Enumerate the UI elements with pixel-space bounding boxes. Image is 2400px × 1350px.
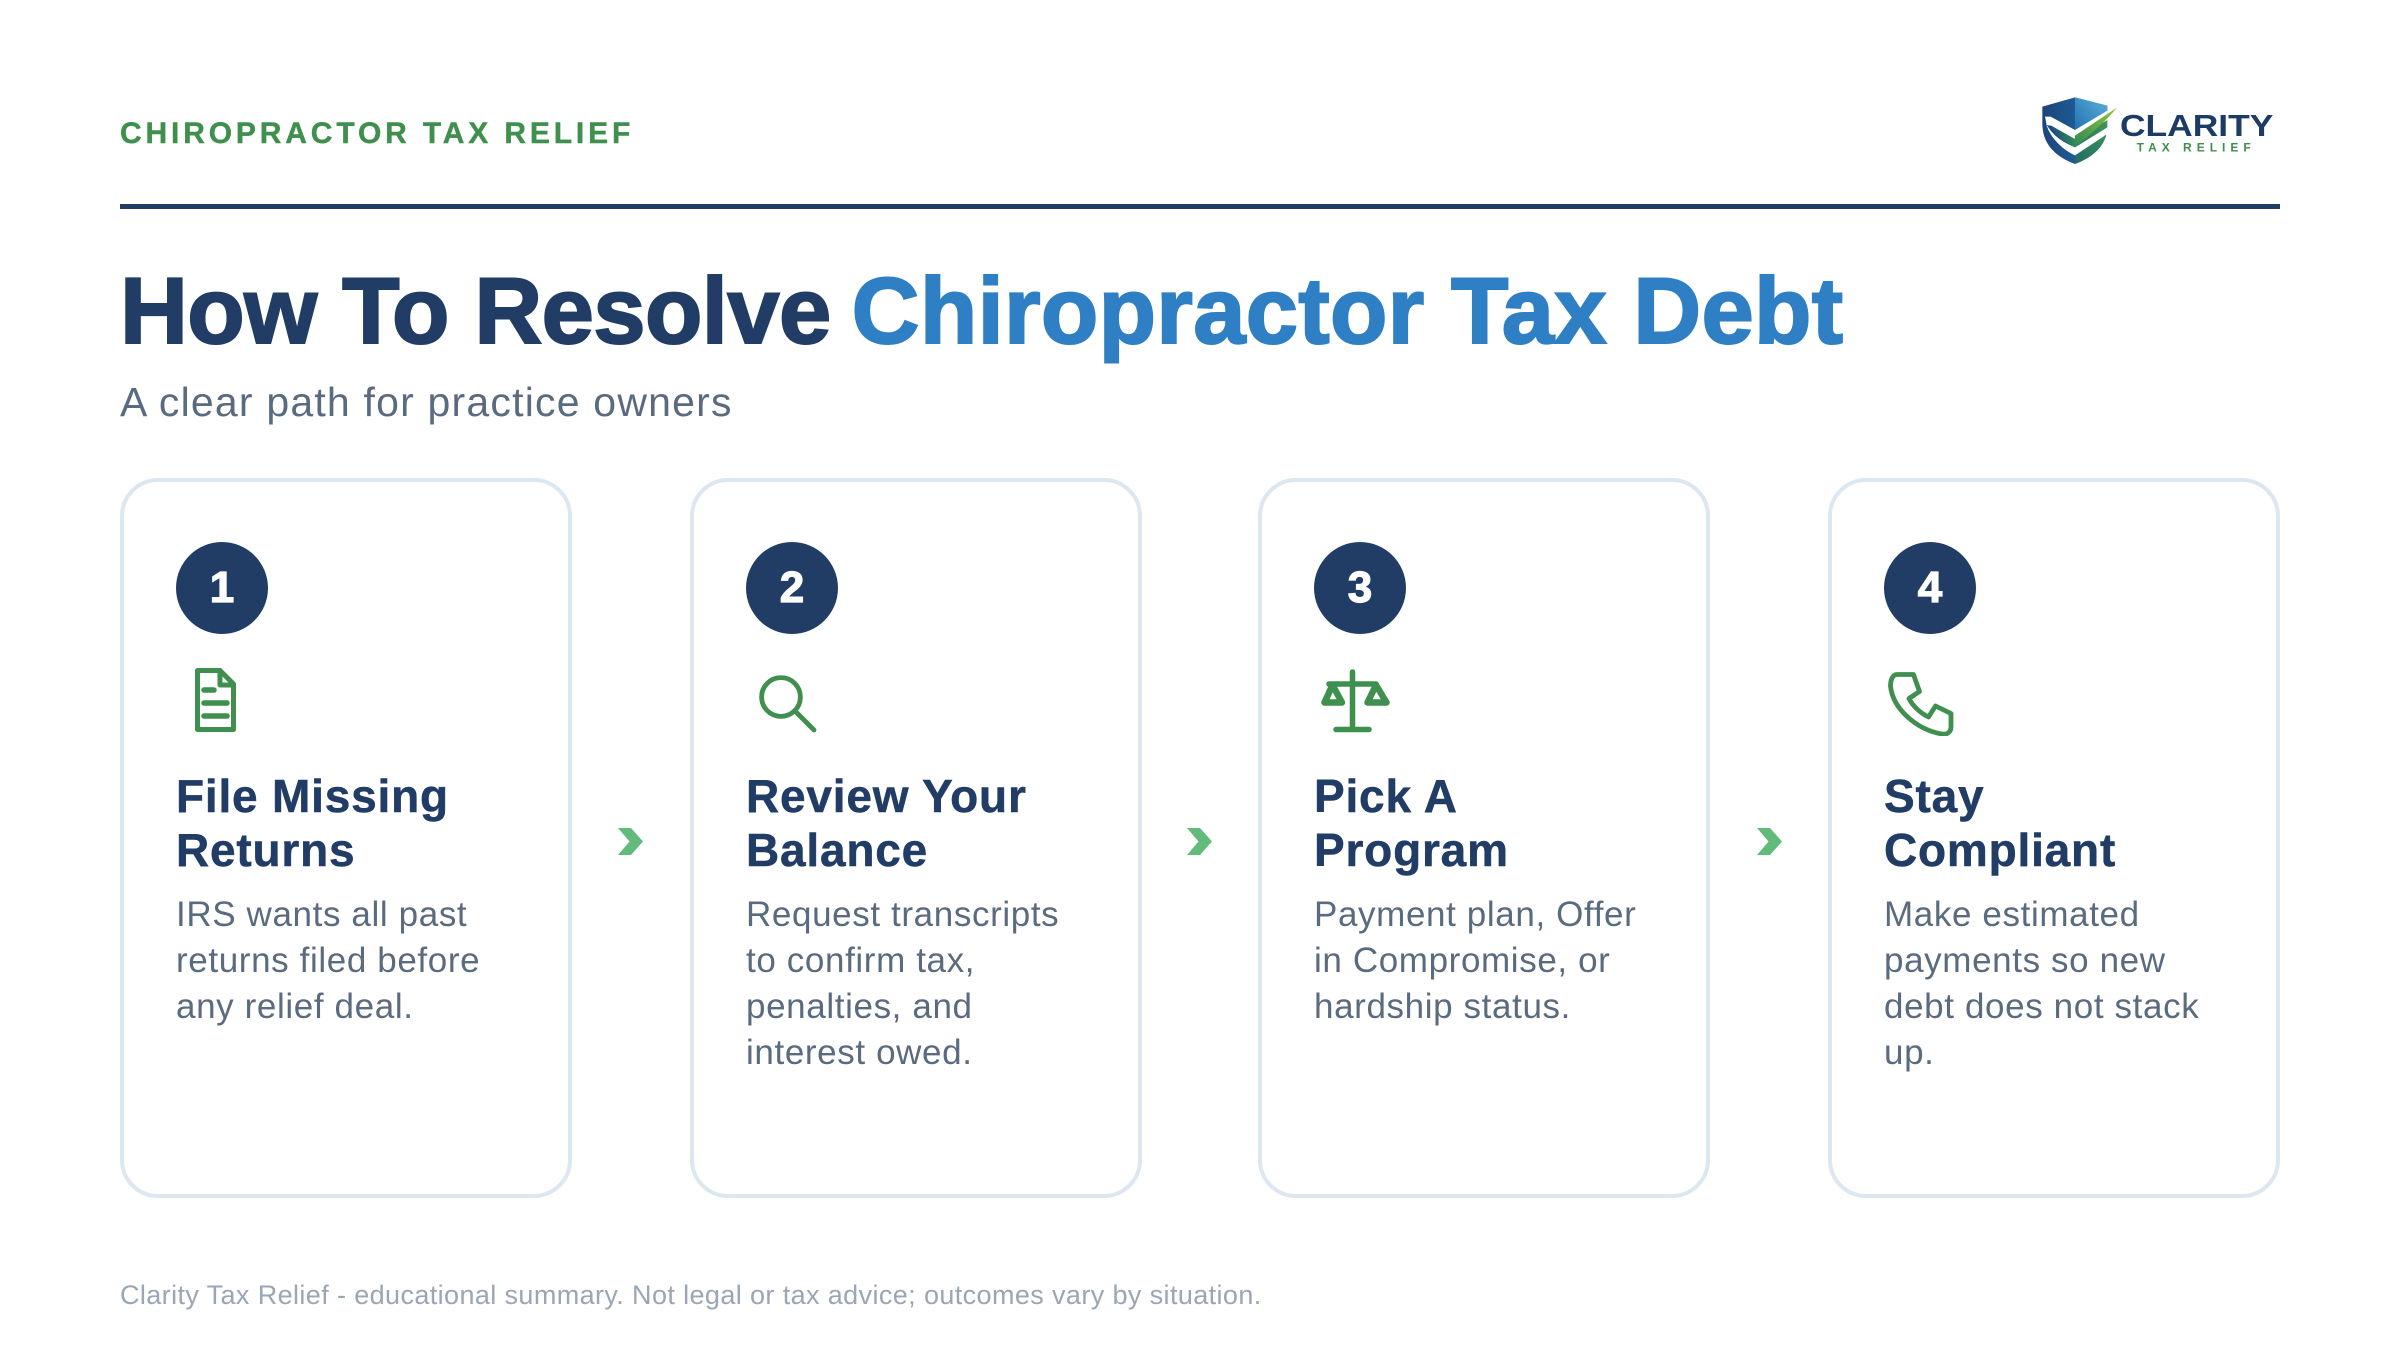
step 2 text: penalties, and [746,987,973,1026]
step 1 text: returns filed before [176,941,480,980]
step 4 heading: Stay [1884,770,1984,822]
step 4 text: payments so new [1884,941,2166,980]
logo: Clarity Tax Relief [2042,97,2273,164]
step 2 heading: Review Your [746,770,1027,822]
step number 4: 4 [1918,563,1942,612]
step 4 heading [1884,770,2116,876]
icon: scales [1321,669,1390,732]
step number 1 [176,542,268,634]
step 2 heading [746,770,1027,876]
panel: step 2 [690,478,1142,1198]
icon: phone [1888,672,1954,736]
step number 3 [1314,542,1406,634]
step 1 heading: Returns [176,824,355,876]
step 2 text [746,895,1059,1072]
panel: step 1 [120,478,572,1198]
header rule [120,204,2280,209]
step number 2: 2 [780,563,804,612]
arrow 2 to 3 [1187,828,1212,855]
step 3 text: hardship status. [1314,987,1571,1026]
step 3 text: in Compromise, or [1314,941,1610,980]
step 1 text: any relief deal. [176,987,414,1026]
footer note: Clarity Tax Relief - educational summary. Not legal or tax advice; outcomes vary by situation. [120,1280,1262,1310]
step number 4 [1884,542,1976,634]
step 2 text: to confirm tax, [746,941,975,980]
step 3 heading [1314,770,1509,876]
title: How To Resolve Chiropractor Tax Debt [120,258,1843,363]
eyebrow label: CHIROPRACTOR TAX RELIEF [120,117,634,150]
arrow 1 to 2 [618,828,643,855]
icon: document [195,668,236,732]
logo wordmark: CLARITY [2120,109,2273,143]
step 1 text: IRS wants all past [176,895,467,934]
step number 1: 1 [210,563,234,612]
step 4 heading: Compliant [1884,824,2116,876]
step number 2 [746,542,838,634]
step 4 text: up. [1884,1033,1935,1072]
step 2 heading: Balance [746,824,928,876]
step 4 text [1884,895,2199,1072]
step 3 text: Payment plan, Offer [1314,895,1636,934]
step 1 heading [176,770,449,876]
step number 3: 3 [1348,563,1372,612]
step 3 text [1314,895,1636,1026]
step 2 text: interest owed. [746,1033,973,1072]
step 3 heading: Program [1314,824,1509,876]
step 2 text: Request transcripts [746,895,1059,934]
step 3 heading: Pick A [1314,770,1458,822]
arrow 3 to 4 [1757,828,1782,855]
subtitle: A clear path for practice owners [120,379,733,425]
step 4 text: debt does not stack [1884,987,2199,1026]
panel: step 3 [1258,478,1710,1198]
logo: Clarity Tax Relief: TAX RELIEF [2137,141,2251,155]
icon: magnifier [759,675,816,732]
step 4 text: Make estimated [1884,895,2140,934]
panel: step 4 [1828,478,2280,1198]
step 1 heading: File Missing [176,770,449,822]
step 1 text [176,895,480,1026]
